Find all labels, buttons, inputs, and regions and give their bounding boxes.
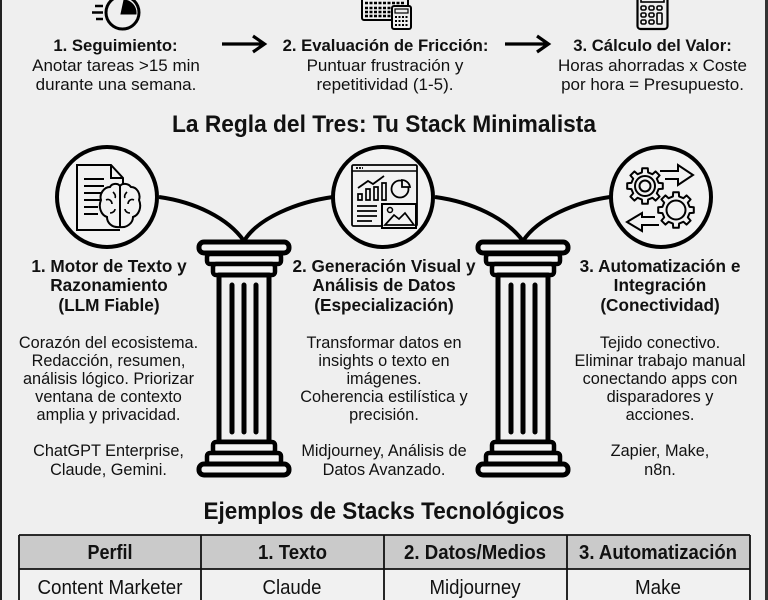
step 3: calculo del valor (558, 36, 747, 94)
column 2: generacion visual: Coherencia estilística y (300, 388, 469, 406)
column 3: automatizacion: Integración (614, 275, 706, 295)
column 2: generacion visual: Análisis de Datos (312, 275, 456, 295)
table header row: 2. Datos/Medios (404, 542, 546, 564)
table header row (88, 542, 737, 564)
column 3: automatizacion: Eliminar trabajo manual (574, 352, 746, 370)
column 1: motor de texto: Razonamiento (50, 275, 168, 295)
step 1: seguimiento: 1. Seguimiento: (53, 36, 178, 55)
step 1: seguimiento (32, 36, 200, 94)
table header row: Perfil (88, 542, 132, 564)
column 1: motor de texto: Claude, Gemini. (50, 461, 167, 479)
heading: ejemplos de stacks: Ejemplos de Stacks Tecnológicos (204, 498, 564, 525)
pillar right (478, 242, 568, 475)
pillar left (199, 242, 289, 475)
heading: la regla del tres: La Regla del Tres: Tu Stack Minimalista (172, 111, 596, 138)
column 1: motor de texto (19, 256, 198, 479)
column 2: generacion visual: (Especialización) (314, 295, 454, 315)
step 2: evaluacion de friccion: repetitividad (1-5). (316, 75, 454, 94)
icon: keyboard and calculator (362, 0, 411, 29)
step 3: calculo del valor: 3. Cálculo del Valor: (573, 36, 732, 55)
step 3: calculo del valor: Horas ahorradas x Coste (558, 56, 747, 75)
column 3: automatizacion (574, 256, 746, 479)
icon circle 3: gears and arrows (611, 147, 711, 247)
column 3: automatizacion: n8n. (644, 461, 676, 479)
arrow: step 2 to step 3 (505, 36, 548, 52)
column 1: motor de texto: análisis lógico. Priorizar (23, 370, 195, 388)
column 3: automatizacion: disparadores y (607, 388, 714, 406)
table row: content marketer: Midjourney (430, 577, 520, 599)
column 1: motor de texto: Redacción, resumen, (32, 352, 185, 370)
column 3: automatizacion: Tejido conectivo. (600, 334, 720, 352)
icon circle 1: document and brain (57, 147, 157, 247)
icon: stopwatch (92, 0, 139, 29)
column 3: automatizacion: (Conectividad) (600, 295, 720, 315)
column 1: motor de texto: amplia y privacidad. (37, 406, 180, 424)
column 2: generacion visual (292, 256, 476, 479)
step 1: seguimiento: Anotar tareas >15 min (32, 56, 200, 75)
column 2: generacion visual: imágenes. (346, 370, 422, 388)
connector curves (159, 197, 610, 241)
column 1: motor de texto: (LLM Fiable) (58, 295, 160, 315)
table row: content marketer: Content Marketer (38, 577, 183, 599)
column 1: motor de texto: Corazón del ecosistema. (19, 334, 198, 352)
column 2: generacion visual: Midjourney, Análisis de (301, 442, 467, 460)
arrow: step 1 to step 2 (222, 36, 264, 52)
column 2: generacion visual: 2. Generación Visual y (292, 256, 476, 276)
column 3: automatizacion: acciones. (626, 406, 694, 424)
column 3: automatizacion: 3. Automatización e (580, 256, 740, 276)
column 1: motor de texto: 1. Motor de Texto y (31, 256, 187, 276)
column 2: generacion visual: precisión. (349, 406, 419, 424)
icon: calculator (638, 0, 668, 29)
step 2: evaluacion de friccion: 2. Evaluación de Fricción: (283, 36, 488, 55)
column 2: generacion visual: Datos Avanzado. (323, 461, 445, 479)
column 1: motor de texto: ChatGPT Enterprise, (33, 442, 184, 460)
column 2: generacion visual: Transformar datos en (306, 334, 462, 352)
step 2: evaluacion de friccion (283, 36, 488, 94)
table: stacks (19, 535, 750, 600)
step 3: calculo del valor: por hora = Presupuesto. (561, 75, 744, 94)
column 3: automatizacion: Zapier, Make, (611, 442, 709, 460)
table row: content marketer: Make (635, 577, 681, 599)
table header row: 3. Automatización (579, 542, 737, 564)
column 3: automatizacion: conectando apps con (583, 370, 737, 388)
table row: content marketer (38, 577, 681, 599)
table row: content marketer: Claude (262, 577, 322, 599)
icon circle 2: charts and image (333, 147, 433, 247)
column 2: generacion visual: insights o texto en (318, 352, 450, 370)
step 1: seguimiento: durante una semana. (36, 75, 196, 94)
step 2: evaluacion de friccion: Puntuar frustración y (307, 56, 464, 75)
table header row: 1. Texto (258, 542, 327, 564)
column 1: motor de texto: ventana de contexto (35, 388, 182, 406)
